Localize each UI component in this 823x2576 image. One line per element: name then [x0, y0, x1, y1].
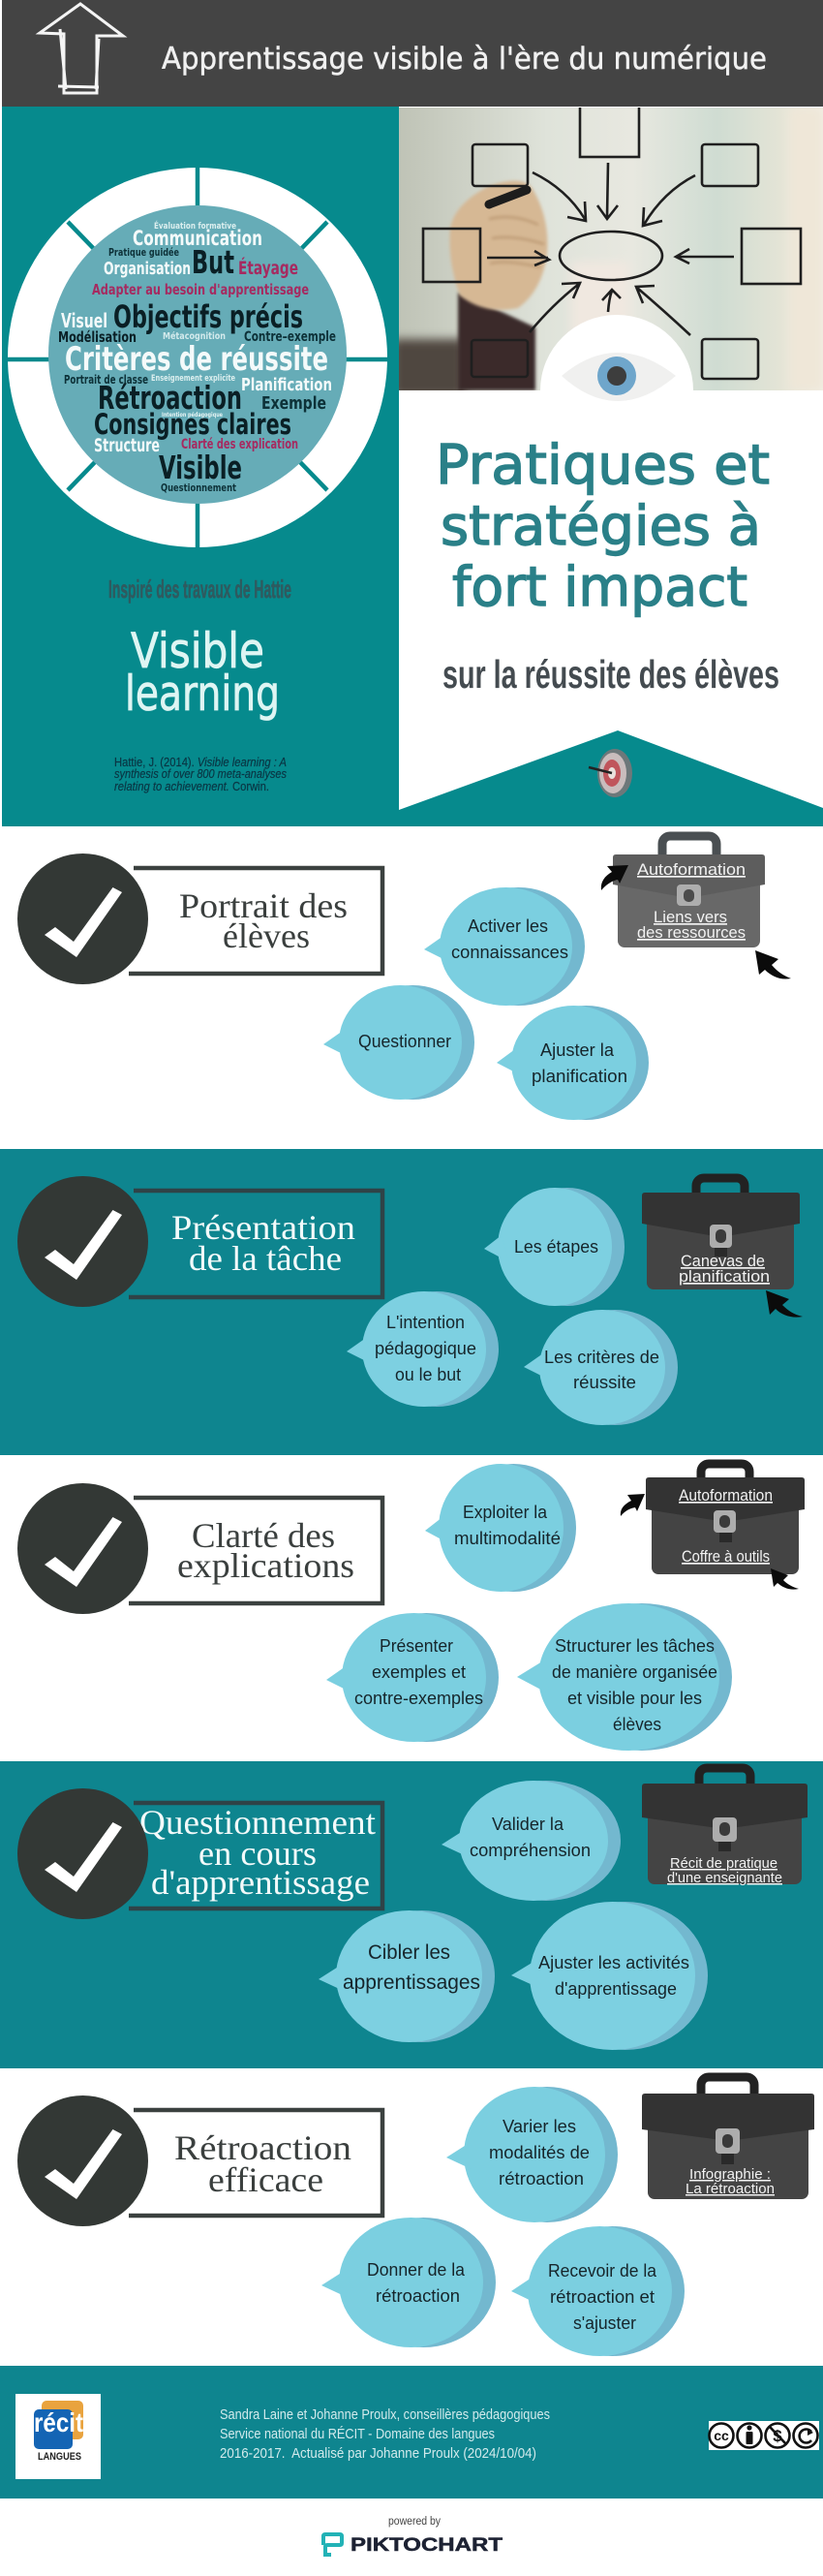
arrow: to Autoformation	[621, 1494, 645, 1516]
briefcase: Canevas de planification: planification	[679, 1267, 770, 1286]
credit: powered by Piktochart: PIKTOCHART	[351, 2535, 503, 2556]
heading box	[129, 1803, 382, 1909]
word cloud: Pratique guidée	[108, 246, 179, 259]
arrow: to Canevas de planification	[766, 1290, 803, 1318]
briefcase: Autoformation, Liens vers des ressources: Liens vers	[654, 908, 727, 926]
bubble: Donner de la rétroaction	[321, 2218, 496, 2347]
heading box: efficace	[208, 2160, 323, 2199]
icon: check mark	[17, 1176, 148, 1307]
credits: Service national du RÉCIT - Domaine des langues	[220, 2426, 495, 2442]
bubble: Recevoir de la rétroaction et s'ajuster: s'ajuster	[573, 2312, 636, 2333]
briefcase: Infographie La rétroaction	[642, 2077, 814, 2199]
credit: powered by Piktochart	[323, 2516, 503, 2556]
arrow: to Autoformation	[601, 865, 628, 890]
bubble: Les étapes	[484, 1188, 625, 1306]
heading box	[129, 1191, 382, 1297]
heading: Visible learning: learning	[125, 666, 280, 722]
word cloud: Planification	[241, 375, 332, 395]
word cloud: Communication	[133, 227, 262, 250]
citation	[114, 755, 287, 793]
icon: sketched up arrow	[40, 4, 123, 93]
bubble: Présenter exemples et contre-exemples: contre-exemples	[354, 1688, 483, 1708]
bubble: Présenter exemples et contre-exemples	[326, 1613, 499, 1742]
panel: Pratiques et stratégies	[397, 107, 823, 826]
bubble: L'intention pédagogique ou le but	[347, 1291, 499, 1407]
bubble: Les critères de réussite	[524, 1310, 678, 1425]
icon: Creative Commons licence: cc	[714, 2428, 729, 2443]
heading box: élèves	[223, 916, 310, 955]
word cloud: Critères de réussite	[65, 340, 328, 379]
heading box: en cours	[198, 1834, 317, 1873]
heading: Pratiques et stratégies à fort impact	[436, 434, 770, 619]
heading box: Rétroaction	[174, 2128, 351, 2167]
bubble: Donner de la rétroaction: Donner de la	[367, 2259, 466, 2280]
bubble: Structurer les tâches: élèves	[613, 1714, 661, 1734]
heading: Visible learning: Visible	[131, 623, 264, 679]
bubble: Recevoir de la rétroaction et s'ajuster: Recevoir de la	[548, 2260, 657, 2281]
word cloud: Modélisation	[58, 328, 137, 346]
icon: check mark	[17, 2095, 148, 2226]
bubble: Varier les modalités de rétroaction: Varier les	[503, 2116, 576, 2136]
briefcase: Récit de pratique d'une enseignante	[642, 1768, 808, 1886]
citation: synthesis of over 800 meta-analyses	[114, 766, 287, 781]
bubble: Structurer les tâches: Structurer les tâches	[555, 1635, 715, 1656]
bubble: Présenter exemples et contre-exemples: exemples et	[372, 1661, 466, 1682]
word cloud: Évaluation formative	[154, 220, 236, 232]
bubble: Les critères de réussite: réussite	[573, 1372, 636, 1392]
word cloud: Structure	[94, 435, 160, 456]
briefcase: Autoformation, Liens vers des ressources	[613, 836, 765, 947]
briefcase: Autoformation, Liens vers des ressources: Autoformation	[637, 860, 746, 879]
bubble: Présenter exemples et contre-exemples: Présenter	[380, 1635, 453, 1656]
section 4: Questionnement en cours d'apprentissage	[0, 1761, 823, 2068]
bubble: Cibler les apprentissages: Cibler les	[368, 1941, 450, 1964]
heading box	[129, 868, 382, 974]
word cloud: Contre–exemple	[244, 329, 336, 345]
word cloud: Visible	[159, 449, 242, 486]
word cloud: Adapter au besoin d'apprentissage	[92, 281, 309, 298]
word cloud: Exemple	[261, 393, 326, 414]
bubble: L'intention pédagogique ou le but: ou le but	[395, 1364, 461, 1384]
bubble: Varier les modalités de rétroaction	[446, 2087, 618, 2222]
diagram sketch	[423, 102, 801, 379]
bubble: L'intention pédagogique ou le but: L'intention	[386, 1312, 465, 1332]
citation: relating to achievement. Corwin.	[114, 779, 269, 793]
word cloud: Visuel	[61, 309, 107, 332]
briefcase: Récit de pratique d'une enseignante: d'une enseignante	[667, 1870, 782, 1886]
logo: RÉCIT Langues: LANGUES	[38, 2451, 81, 2463]
bubble: Les critères de réussite: Les critères de	[544, 1347, 659, 1367]
bubble: Ajuster les activités d'apprentissage: Ajuster les activités	[538, 1952, 689, 1972]
word cloud: Enseignement explicite	[151, 374, 235, 384]
logo: RÉCIT Langues: récit	[34, 2407, 83, 2437]
credit: powered by Piktochart: powered by	[388, 2516, 441, 2528]
bubble: Recevoir de la rétroaction et s'ajuster	[511, 2226, 685, 2356]
arrow: to Liens vers des ressources	[755, 950, 791, 979]
bubble: Varier les modalités de rétroaction: modalités de	[489, 2142, 590, 2162]
heading box	[129, 2110, 382, 2216]
bubble: Questionner: Questionner	[358, 1031, 451, 1051]
bubble: Structurer les tâches	[517, 1603, 732, 1751]
briefcase: Canevas de planification: Canevas de	[681, 1252, 765, 1270]
word cloud: Métacognition	[163, 330, 226, 342]
bubble: Activer les connaissances: Activer les	[468, 916, 548, 936]
bubble: Ajuster la planification: Ajuster la	[540, 1040, 615, 1060]
bubble: Structurer les tâches: de manière organisée	[552, 1661, 717, 1682]
word cloud: Portrait de classe	[64, 373, 148, 387]
icon: check mark	[17, 1483, 148, 1614]
bubble: Cibler les apprentissages	[319, 1910, 495, 2042]
briefcase: Infographie La rétroaction: Infographie :	[689, 2166, 771, 2183]
banner pentagon	[399, 730, 823, 826]
bubble: Ajuster les activités d'apprentissage	[511, 1902, 708, 2050]
word cloud: But	[192, 243, 234, 281]
heading: Pratiques et stratégies à fort impact: stratégies à	[441, 495, 761, 558]
briefcase: Canevas de planification	[642, 1178, 800, 1289]
bubble: Les étapes: Les étapes	[514, 1236, 598, 1257]
bubble: Valider la compréhension	[442, 1781, 621, 1901]
word cloud: Questionnement	[161, 481, 236, 494]
word cloud: Consignes claires	[94, 408, 291, 441]
bubble: Cibler les apprentissages: apprentissages	[343, 1971, 480, 1994]
word cloud: Organisation	[104, 259, 191, 279]
credits	[220, 2406, 550, 2462]
bubble: Exploiter la multimodalité: Exploiter la	[463, 1502, 548, 1522]
briefcase: Autoformation, Coffre à outils: Coffre à outils	[682, 1547, 770, 1566]
heading box: de la tâche	[189, 1239, 342, 1278]
word cloud	[48, 205, 347, 504]
section 5: Rétroaction efficace	[0, 2068, 823, 2366]
bubble: Ajuster la planification: planification	[532, 1066, 627, 1086]
heading: Pratiques et stratégies à fort impact: fort impact	[452, 556, 747, 619]
icon: target with dart	[589, 749, 632, 797]
panel: photo of hand drawing a diagram	[392, 102, 823, 397]
heading box: Présentation	[171, 1208, 355, 1247]
footer band	[0, 2366, 823, 2498]
briefcase: Autoformation, Coffre à outils: Autoformation	[679, 1486, 773, 1505]
briefcase: Récit de pratique d'une enseignante: Récit de pratique	[670, 1855, 777, 1872]
briefcase: Autoformation, Liens vers des ressources: des ressources	[637, 923, 746, 942]
heading: Pratiques et stratégies à fort impact: Pratiques et	[436, 434, 770, 497]
subheading: Inspiré des travaux de Hattie: Inspiré des travaux de Hattie	[108, 574, 291, 604]
bubble: L'intention pédagogique ou le but: pédagogique	[375, 1338, 476, 1358]
bubble: Activer les connaissances: connaissances	[451, 942, 568, 962]
heading box: d'apprentissage	[151, 1863, 370, 1902]
chart: white segmented ring	[8, 165, 387, 550]
word cloud: Objectifs précis	[113, 298, 303, 335]
title: Apprentissage visible à l'ère du numérique	[162, 42, 767, 77]
heading box: Questionnement	[139, 1803, 376, 1842]
panel: Visible learning cover	[2, 107, 399, 826]
icon: eye	[540, 315, 693, 401]
bubble: Valider la compréhension: compréhension	[470, 1840, 591, 1860]
icon: Creative Commons licence	[709, 2421, 819, 2450]
word cloud: Rétroaction	[98, 379, 242, 417]
credits: 2016-2017. Actualisé par Johanne Proulx (2024/10/04)	[220, 2445, 536, 2462]
section 3: Clarté des explications	[0, 1455, 823, 1761]
bubble: Donner de la rétroaction: rétroaction	[376, 2285, 460, 2306]
icon: Creative Commons licence: $	[773, 2427, 782, 2445]
bubble: Valider la compréhension: Valider la	[492, 1814, 564, 1834]
logo: RÉCIT Langues	[15, 2394, 101, 2479]
heading box: Portrait des	[179, 886, 348, 925]
heading box: explications	[177, 1546, 354, 1585]
heading: Visible learning	[125, 623, 280, 722]
bubble: Activer les connaissances	[424, 887, 585, 1006]
hand and sleeve	[449, 181, 547, 390]
bubble: Recevoir de la rétroaction et s'ajuster: rétroaction et	[550, 2286, 655, 2307]
bubble: Ajuster la planification	[497, 1006, 649, 1120]
briefcase: Infographie La rétroaction: La rétroaction	[686, 2181, 775, 2197]
citation: Hattie, J. (2014). Visible learning : A	[114, 755, 287, 769]
credits: Sandra Laine et Johanne Proulx, conseillères pédagogiques	[220, 2406, 550, 2423]
bubble: Varier les modalités de rétroaction: rétroaction	[499, 2168, 584, 2188]
header band	[2, 0, 823, 107]
heading box: Clarté des	[192, 1516, 335, 1555]
section 1: Portrait des élèves	[0, 826, 823, 1149]
icon: check mark	[17, 853, 148, 984]
arrow: to Coffre à outils	[771, 1568, 799, 1590]
bubble: Exploiter la multimodalité: multimodalité	[454, 1528, 561, 1548]
heading box	[129, 1498, 382, 1603]
icon: Piktochart logo	[323, 2534, 342, 2555]
bubble: Structurer les tâches: et visible pour les	[567, 1688, 702, 1708]
word cloud: Étayage	[238, 257, 298, 279]
icon: check mark	[17, 1788, 148, 1919]
word cloud: Clarté des explication	[181, 437, 298, 452]
bubble: Ajuster les activités d'apprentissage: d'apprentissage	[555, 1978, 677, 1999]
bubble: Questionner	[323, 985, 474, 1100]
briefcase: Autoformation, Coffre à outils	[646, 1464, 805, 1574]
bubble: Exploiter la multimodalité	[425, 1464, 576, 1592]
word cloud: Intention pédagogique	[162, 412, 223, 419]
section 2: Présentation de la tâche	[0, 1149, 823, 1455]
